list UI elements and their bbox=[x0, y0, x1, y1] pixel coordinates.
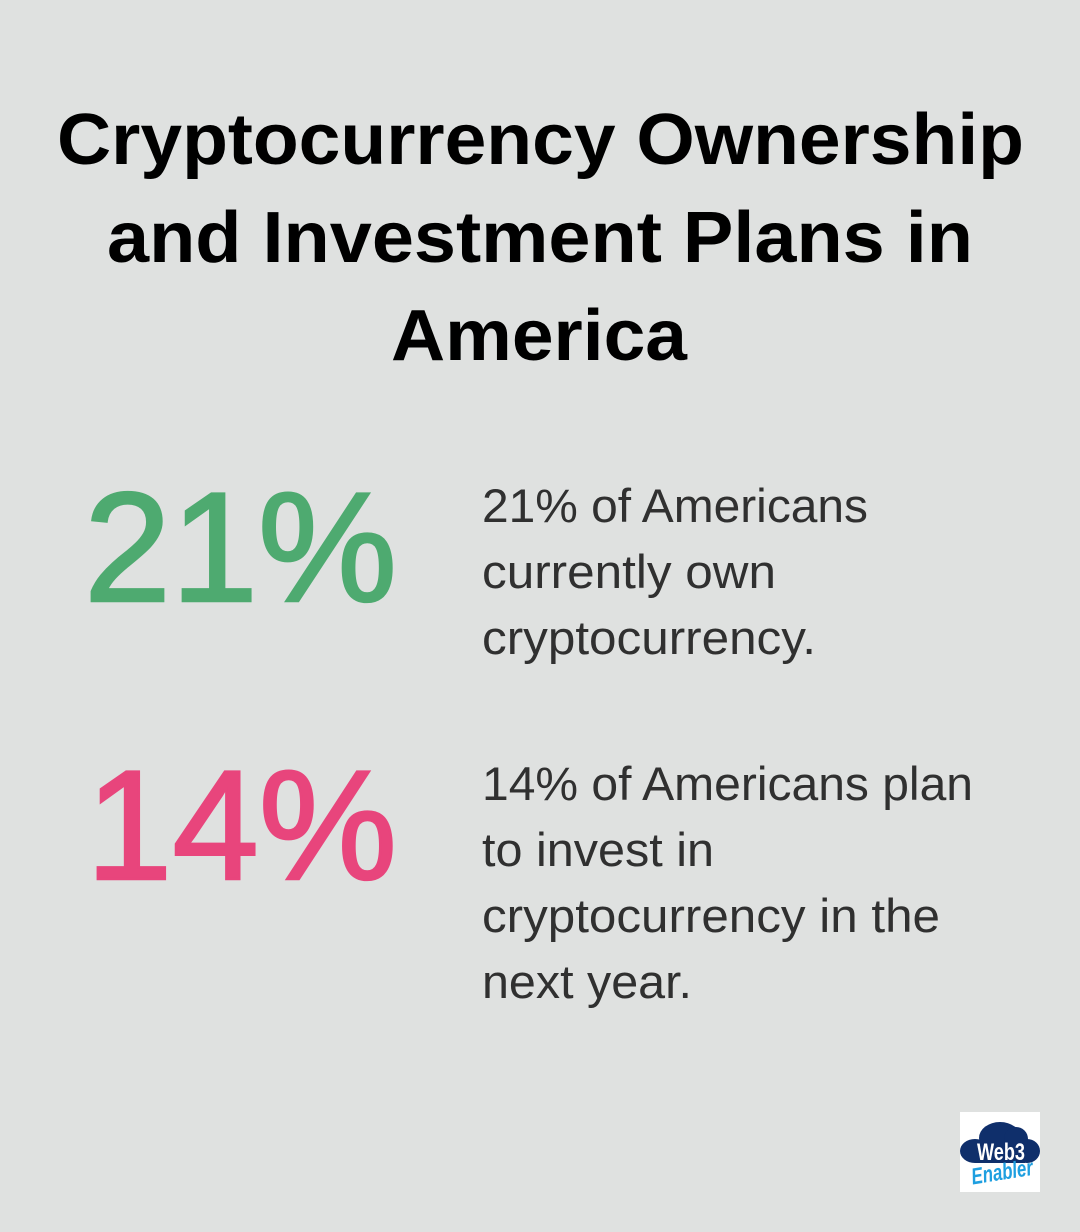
description: 14% of Americans: 14% of Americans plan bbox=[482, 757, 973, 810]
big number: 21%: 21% bbox=[84, 461, 397, 635]
description: 21% of Americans: 21% of Americans bbox=[482, 479, 868, 532]
title: America bbox=[391, 296, 688, 376]
description: 21% of Americans bbox=[482, 479, 868, 664]
description: 21% of Americans: cryptocurrency. bbox=[482, 611, 816, 664]
title: and Investment Plans in bbox=[107, 198, 973, 278]
wordmark: Enabler: Enabler bbox=[969, 1154, 1035, 1189]
big number: 14%: 14% bbox=[86, 739, 397, 913]
wordmark: Web3: Web3 bbox=[977, 1139, 1025, 1166]
description: 14% of Americans: cryptocurrency in the bbox=[482, 889, 940, 942]
description: 14% of Americans bbox=[482, 757, 973, 1008]
description: 14% of Americans: next year. bbox=[482, 955, 692, 1008]
icon: cloud bbox=[960, 1122, 1040, 1163]
description: 14% of Americans: to invest in bbox=[482, 823, 714, 876]
stat row: 14% plan to invest bbox=[86, 739, 973, 1008]
description: 21% of Americans: currently own bbox=[482, 545, 776, 598]
stat row: 21% own cryptocurrency bbox=[84, 461, 868, 664]
logo: Web3 Enabler bbox=[960, 1112, 1040, 1192]
title bbox=[57, 100, 1024, 376]
title: Cryptocurrency Ownership bbox=[57, 100, 1024, 180]
